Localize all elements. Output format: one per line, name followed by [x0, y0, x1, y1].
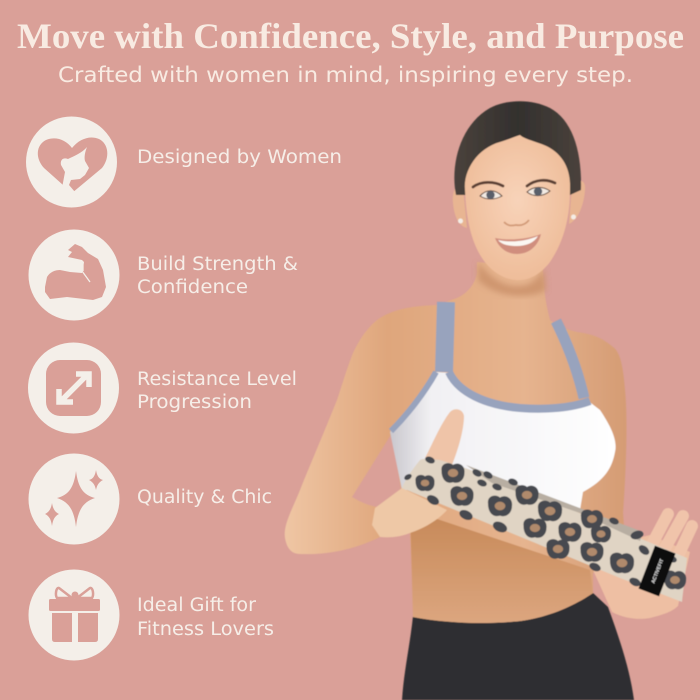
- band label tag: ACTIVEFIT: [651, 558, 665, 584]
- smile: [495, 234, 541, 254]
- label: Build Strength &: [137, 254, 298, 275]
- feature: quality and chic: [28, 454, 272, 544]
- subtitle: Crafted with women in mind, inspiring every step.: [58, 63, 633, 87]
- woman holding resistance band: [285, 101, 692, 700]
- earrings: [458, 214, 576, 224]
- icon: flexed arm: [28, 230, 120, 320]
- feature: ideal gift: [28, 570, 274, 660]
- label: Resistance Level: [137, 369, 297, 390]
- label: Fitness Lovers: [137, 619, 274, 640]
- nose: [504, 220, 529, 226]
- right hand: [593, 514, 692, 619]
- title: Move with Confidence, Style, and Purpose: [17, 16, 684, 56]
- left hand fingers: [425, 409, 464, 470]
- icon: sparkles: [28, 454, 120, 544]
- label: Progression: [137, 392, 252, 413]
- band leopard spots: [403, 455, 686, 589]
- band label tag: [638, 546, 676, 596]
- label: [137, 595, 274, 640]
- left palm: [372, 488, 447, 537]
- bra trim: [391, 302, 590, 431]
- label: [137, 369, 297, 413]
- feature: resistance level: [28, 342, 297, 434]
- label: Designed by Women: [137, 147, 342, 168]
- resistance band: [402, 455, 687, 602]
- shorts: [402, 593, 634, 700]
- label: Confidence: [137, 277, 248, 298]
- label: Ideal Gift for: [137, 595, 256, 616]
- label: Quality & Chic: [137, 487, 272, 508]
- feature: build strength: [28, 230, 298, 320]
- eyebrows: [473, 180, 555, 187]
- hair: [454, 101, 581, 195]
- sports bra: [390, 372, 616, 510]
- icon: gift box: [28, 570, 120, 660]
- label: [137, 254, 298, 298]
- face: [465, 135, 570, 280]
- neck shadow: [478, 262, 546, 296]
- feature: designed by women: [26, 116, 342, 208]
- ears: [453, 181, 585, 228]
- arms and torso: [285, 262, 626, 623]
- icon: expand arrows: [28, 342, 119, 434]
- tummy shading: [410, 510, 593, 623]
- eyes: [480, 187, 550, 199]
- gap between arm and torso: [352, 433, 401, 507]
- icon: heart with woman silhouette: [26, 116, 117, 208]
